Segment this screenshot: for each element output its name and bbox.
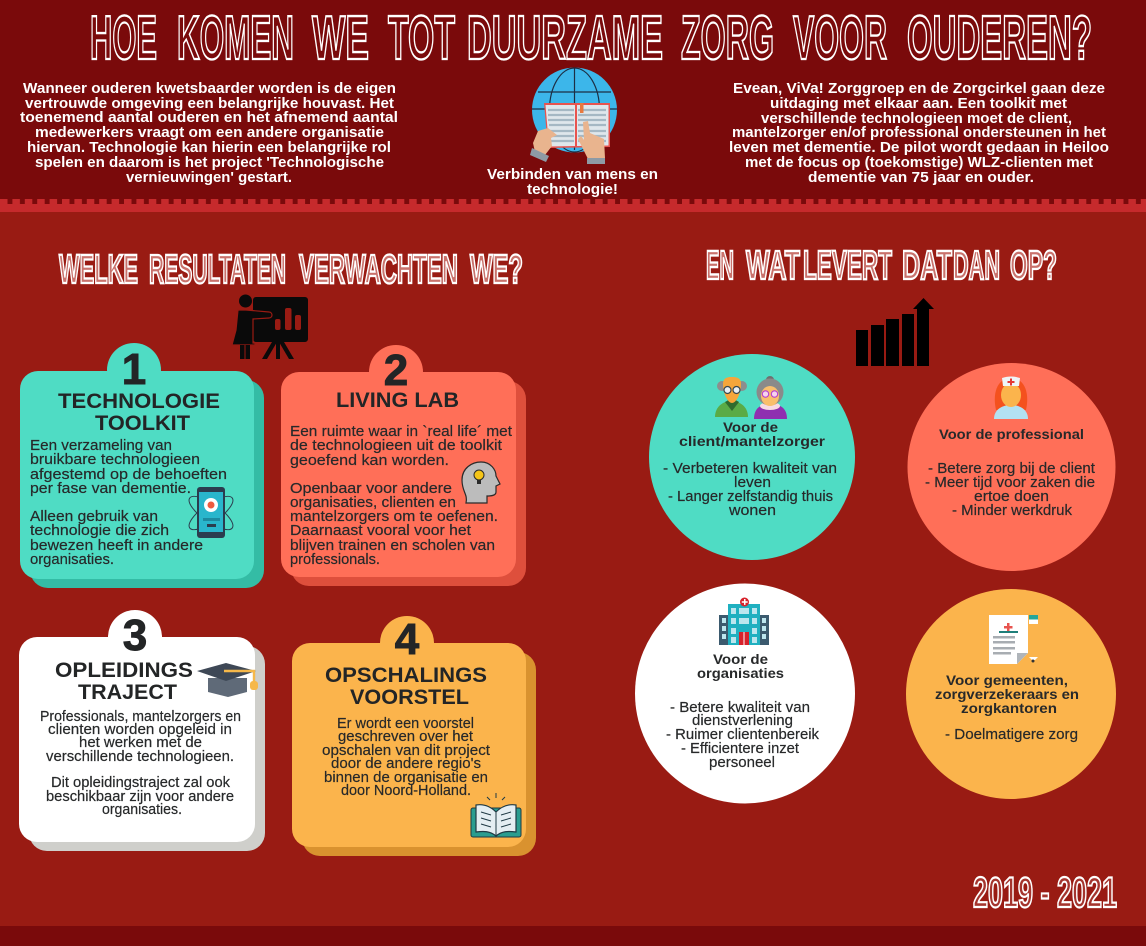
title: ZORG — [681, 4, 774, 73]
heading: organisaties — [697, 666, 784, 681]
title: TOT — [388, 4, 455, 73]
intro text left — [20, 81, 398, 186]
intro text left: vertrouwde omgeving een belangrijke houvast. Het — [25, 96, 394, 112]
body text: blijven trainen en scholen van — [290, 537, 495, 554]
list: ertoe doen — [974, 488, 1049, 505]
body text: binnen de organisatie en — [324, 769, 488, 786]
caption: verbinden: Verbinden van mens en — [487, 167, 658, 183]
heading: Voor de professional — [939, 427, 1084, 442]
heading: outcomes: EN — [706, 242, 734, 288]
body text: het werken met de — [79, 734, 202, 751]
heading: zorgkantoren — [961, 701, 1057, 716]
intro text right: verschillende technologieen moet de client, — [761, 111, 1072, 127]
list: dienstverlening — [692, 712, 793, 729]
footer band — [0, 926, 1146, 946]
body text: geoefend kan worden. — [290, 452, 449, 469]
icon: nurse — [994, 376, 1028, 419]
panel: circle gemeenten — [906, 589, 1116, 799]
body text: clienten worden opgeleid in — [48, 721, 232, 738]
list: - Ruimer clientenbereik — [666, 726, 819, 743]
body text: Een verzameling van — [30, 437, 172, 454]
heading — [325, 664, 487, 709]
intro text left: vernieuwingen' gestart. — [126, 170, 292, 186]
panel: circle professional — [908, 363, 1116, 571]
body text: Daarnaast vooral voor het — [290, 522, 472, 539]
intro text right: Evean, ViVa! Zorggroep en de Zorgcirkel gaan deze — [733, 81, 1105, 97]
body text — [290, 423, 513, 568]
heading: outcomes: DAT — [902, 242, 952, 288]
title: HOE — [90, 4, 157, 73]
heading — [697, 652, 784, 681]
heading: TOOLKIT — [95, 412, 190, 435]
heading: outcomes: DAN — [953, 242, 1000, 288]
body text: organisaties, clienten en — [290, 494, 456, 511]
heading: OPSCHALINGS — [325, 664, 487, 687]
icon: rising bars — [856, 298, 934, 366]
body text — [40, 708, 241, 818]
icon: head with light bulb — [462, 462, 500, 503]
heading: zorgverzekeraars en — [935, 687, 1079, 702]
panel: card 2 living lab — [281, 345, 526, 586]
body text: Professionals, mantelzorgers en — [40, 708, 241, 725]
intro text right: met de focus op (toekomstige) WLZ-clienten met — [745, 155, 1093, 171]
heading: results: WELKE — [59, 246, 138, 292]
list — [663, 460, 837, 519]
list: - Doelmatigere zorg — [945, 726, 1078, 743]
list: personeel — [709, 754, 775, 771]
heading: outcomes: LEVERT — [803, 242, 892, 288]
body text: bruikbare technologieen — [30, 451, 200, 468]
body text — [322, 715, 491, 799]
icon: hospital — [719, 598, 769, 645]
body text: Er wordt een voorstel — [337, 715, 474, 732]
list: - Efficientere inzet — [681, 740, 800, 757]
panel: card 3 opleidingstraject — [19, 610, 265, 851]
body text: door de andere regio's — [331, 755, 481, 772]
body text: door Noord-Holland. — [341, 782, 471, 799]
body text: verschillende technologieen. — [46, 748, 234, 765]
heading: OPLEIDINGS — [55, 659, 193, 682]
intro text left: Wanneer ouderen kwetsbaarder worden is de eigen — [23, 81, 396, 97]
intro text right: dementie van 75 jaar en ouder. — [808, 170, 1034, 186]
intro text left: spelen en daarom is het project 'Technologische — [35, 155, 384, 171]
list: - Minder werkdruk — [952, 502, 1072, 519]
body text: Dit opleidingstraject zal ook — [51, 774, 230, 791]
heading — [679, 420, 826, 449]
list: - Betere zorg bij de client — [928, 460, 1096, 477]
caption: verbinden: technologie! — [527, 182, 618, 198]
body text: opschalen van dit project — [322, 742, 491, 759]
body text: beschikbaar zijn voor andere — [46, 788, 234, 805]
heading: Voor gemeenten, — [946, 673, 1068, 688]
heading — [55, 659, 193, 704]
heading: results: VERWACHTEN — [299, 246, 458, 292]
heading: outcomes: WAT — [746, 242, 800, 288]
heading: outcomes: OP? — [1010, 242, 1057, 288]
panel: circle client/mantelzorger — [649, 354, 855, 560]
body text: per fase van dementie. — [30, 480, 191, 497]
heading: TRAJECT — [78, 681, 177, 704]
heading: Voor de — [713, 652, 769, 667]
heading — [935, 673, 1079, 716]
intro text right: mantelzorger en/of professional ondersteunen in het — [732, 125, 1106, 141]
body text: technologie die zich — [30, 522, 169, 539]
icon: smartphone with atom — [185, 487, 237, 538]
list: - Betere kwaliteit van — [670, 699, 810, 716]
heading: client/mantelzorger — [679, 434, 826, 449]
body text: Een ruimte waar in `real life´ met — [290, 423, 513, 440]
intro text right: leven met dementie. De pilot wordt gedaan in Heiloo — [729, 140, 1109, 156]
intro text left: hiervan. Technologie kan hierin een belangrijke rol — [27, 140, 391, 156]
body text: de technologieen uit de toolkit — [290, 437, 503, 454]
heading: results — [59, 246, 523, 292]
intro text right: uitdaging met elkaar aan. Een toolkit met — [770, 96, 1067, 112]
icon: medical document — [989, 615, 1038, 664]
icon: presenter with chart — [232, 294, 308, 359]
body text: geschreven over het — [338, 728, 474, 745]
body text: Alleen gebruik van — [30, 508, 158, 525]
number 1: 1 — [122, 345, 146, 394]
list — [666, 699, 819, 771]
body text: organisaties. — [30, 551, 114, 568]
list — [925, 460, 1096, 519]
heading: VOORSTEL — [350, 686, 469, 709]
body text: mantelzorgers om te oefenen. — [290, 508, 498, 525]
title: DUURZAME — [467, 4, 663, 73]
list: - Langer zelfstandig thuis — [668, 488, 833, 505]
body text — [30, 437, 227, 568]
number 3: 3 — [123, 611, 147, 660]
heading: Voor de — [723, 420, 779, 435]
body text: professionals. — [290, 551, 380, 568]
list: - Verbeteren kwaliteit van — [663, 460, 837, 477]
panel: circle organisaties — [635, 584, 855, 804]
list: leven — [734, 474, 771, 491]
body text: organisaties. — [102, 801, 182, 818]
title: WE — [312, 4, 369, 73]
title: VOOR — [793, 4, 887, 73]
number 2: 2 — [384, 346, 408, 395]
icon: elderly couple — [715, 376, 787, 419]
body text: bewezen heeft in andere — [30, 537, 203, 554]
intro text left: medewerkers vraagt om een andere organisatie — [35, 125, 384, 141]
heading: outcomes — [706, 242, 1057, 288]
caption: verbinden — [487, 167, 658, 198]
number 4: 4 — [395, 615, 420, 664]
panel: card 4 opschalingsvoorstel — [292, 615, 536, 856]
header band — [0, 0, 1146, 212]
panel: card 1 technologie toolkit — [20, 343, 264, 588]
heading: results: WE? — [470, 246, 523, 292]
intro text left: toenemend aantal ouderen en het afnemend aantal — [20, 110, 398, 126]
title — [90, 4, 1092, 73]
list: - Meer tijd voor zaken die — [925, 474, 1095, 491]
icon: open book — [471, 793, 521, 837]
body text: afgestemd op de behoeften — [30, 466, 227, 483]
heading: LIVING LAB — [336, 389, 459, 412]
intro text right — [729, 81, 1109, 186]
icon: graduation cap — [197, 663, 258, 697]
icon: globe with book and hands — [530, 68, 617, 164]
title: KOMEN — [177, 4, 294, 73]
body text: Openbaar voor andere — [290, 480, 452, 497]
list: wonen — [728, 502, 776, 519]
heading — [58, 390, 220, 435]
heading: results: RESULTATEN — [149, 246, 286, 292]
heading: TECHNOLOGIE — [58, 390, 220, 413]
